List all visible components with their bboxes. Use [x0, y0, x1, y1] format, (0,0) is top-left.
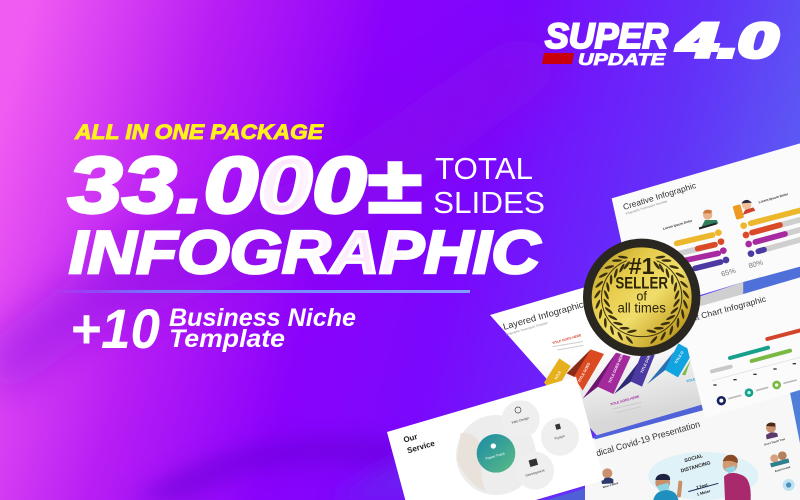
girl illustration	[733, 200, 755, 220]
update word: UPDATE	[578, 50, 666, 69]
business niche template	[169, 304, 356, 353]
right column icons	[740, 222, 754, 257]
ribbons: TITLE GOES HERE	[608, 352, 625, 384]
distancing illustration: DISTANCING	[680, 460, 711, 474]
super word: SUPER	[545, 17, 669, 56]
service circles: Flyspin	[554, 434, 565, 441]
percent labels: Lorem Ipsum Dolor	[758, 192, 789, 204]
ribbons: TITLE GOES	[640, 352, 653, 374]
version number: 4.0	[677, 15, 778, 68]
covid title: Medical Covid-19 Presentation	[583, 419, 701, 462]
gantt axis	[712, 357, 800, 386]
slide: Gantt Chart Infographic	[677, 277, 800, 418]
percent labels: 80%	[747, 257, 764, 270]
small people icons: Wear a Mask	[602, 481, 619, 489]
headline: all in one package: ALL IN ONE PACKAGE	[74, 121, 324, 144]
red bar	[542, 53, 574, 64]
ribbons	[544, 343, 693, 399]
badge text	[615, 253, 668, 316]
slide: Layered Infographic	[490, 259, 704, 439]
distancing illustration	[648, 452, 758, 500]
slide previews	[387, 143, 800, 500]
gantt title: Gantt Chart Infographic	[677, 294, 767, 327]
background brush swoosh	[0, 30, 570, 500]
distancing illustration: 2 Feet	[696, 482, 709, 490]
plus 10: +10	[70, 297, 160, 360]
left column bars	[677, 235, 721, 268]
slide: Creative Infographic: Infographic Powerpoint Template	[625, 199, 668, 216]
small people icons: Avoid Crowd	[774, 465, 791, 473]
service heading: Service	[406, 439, 436, 455]
service photo circle	[456, 415, 536, 495]
label: total slides: TOTAL	[435, 151, 533, 186]
small people icons: Don't Touch Your	[764, 437, 786, 447]
ribbon captions: TITLE GOES HERE	[552, 333, 582, 345]
seller badge	[583, 239, 700, 356]
ribbons: TITLE GOES	[577, 362, 591, 383]
ribbon captions: TITLE	[686, 377, 697, 384]
percent labels: Lorem Ipsum Dolor	[663, 219, 694, 231]
percent labels: 65%	[720, 266, 737, 279]
distancing illustration: 1 Meter	[696, 488, 711, 497]
headline: 33.000 plus-minus: 33.000±	[68, 140, 420, 229]
ribbon captions: TITLE GOES HERE	[610, 394, 640, 407]
label: total slides	[433, 151, 545, 220]
small people icons	[601, 422, 795, 491]
service circles	[477, 400, 579, 490]
slide: Our Service	[387, 377, 604, 500]
right column bars	[751, 210, 800, 251]
super update lockup	[542, 15, 778, 69]
service heading: Our	[402, 432, 419, 445]
gantt legend	[717, 380, 797, 405]
badge text: SELLER	[615, 274, 668, 292]
slide: Layered Infographic: Infographic Powerpoint Template	[505, 321, 548, 337]
divider line	[50, 290, 470, 293]
laurel wreath	[593, 252, 690, 345]
slide: Creative Infographic	[612, 143, 800, 314]
distancing illustration: SOCIAL	[684, 453, 704, 464]
business niche template: Template	[169, 325, 285, 353]
business niche template: Business Niche	[169, 304, 356, 332]
ribbons: TITLE	[554, 370, 562, 380]
label: total slides: SLIDES	[433, 185, 545, 220]
headline: infographic: INFOGRAPHIC	[69, 219, 542, 286]
badge text: of	[636, 289, 647, 303]
badge text: #1	[629, 253, 655, 279]
creative title: Creative Infographic	[622, 180, 697, 212]
gantt bars	[712, 330, 800, 371]
ribbon captions	[552, 333, 697, 413]
badge text: all times	[617, 301, 666, 316]
boy illustration	[699, 210, 718, 229]
slide: Medical Covid-19 Presentation	[547, 384, 800, 500]
service circles: Development	[525, 468, 545, 478]
service circles: Power Point	[485, 452, 505, 461]
layered title: Layered Infographic	[502, 299, 585, 332]
service heading	[402, 432, 436, 455]
percent labels	[663, 192, 789, 279]
left column icons	[715, 229, 729, 263]
service circles: Web Design	[511, 416, 530, 425]
ribbons: TITLE G	[674, 350, 685, 364]
